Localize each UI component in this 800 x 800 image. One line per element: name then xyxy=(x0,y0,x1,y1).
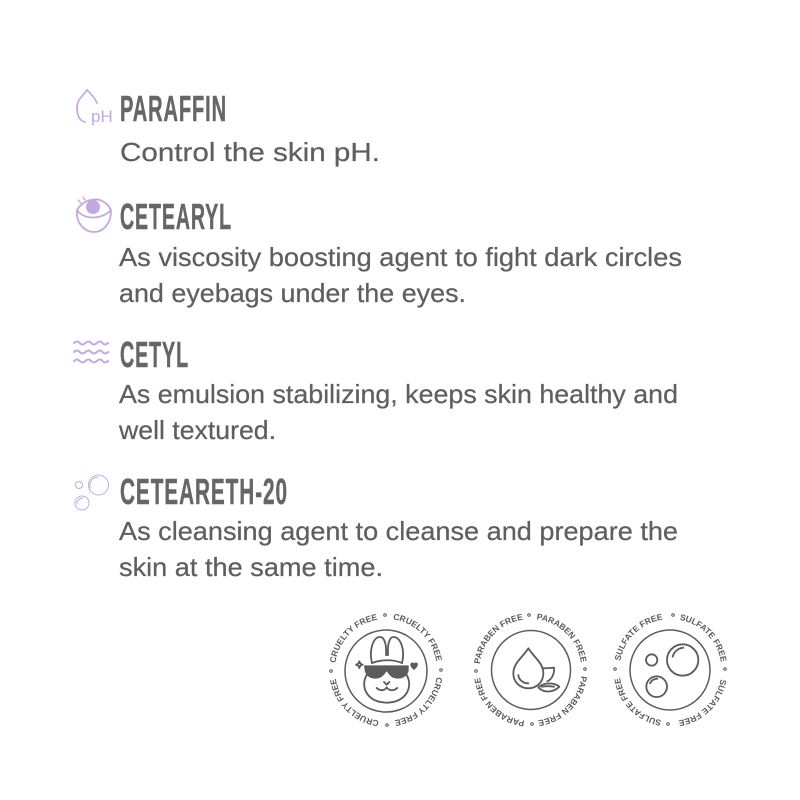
heading: cetyl: CETYL xyxy=(120,334,189,375)
description: cetyl: As emulsion stabilizing, keeps skin healthy and xyxy=(119,379,678,409)
badge: paraben free xyxy=(474,613,587,726)
ingredient: ceteareth-20 xyxy=(75,471,678,582)
description: paraffin: Control the skin pH. xyxy=(120,137,380,167)
badge: sulfate free xyxy=(613,613,727,726)
badge: paraben free: PARABEN FREE xyxy=(474,678,524,726)
description: cetyl: well textured. xyxy=(118,415,276,445)
heading: cetearyl: CETEARYL xyxy=(120,196,232,237)
badge: sulfate free: SULFATE FREE xyxy=(678,680,726,726)
ingredient: paraffin xyxy=(77,88,380,167)
icon: pH drop: pH xyxy=(91,107,113,126)
icon: pH drop xyxy=(77,90,113,126)
badge: cruelty free xyxy=(329,613,443,727)
description: ceteareth-20: As cleansing agent to cleanse and prepare the xyxy=(119,516,678,546)
icon: drop with leaves xyxy=(513,648,559,692)
ingredient: cetearyl xyxy=(77,196,682,308)
badge: sulfate free: SULFATE FREE xyxy=(680,614,727,662)
badge: paraben free: PARABEN FREE xyxy=(536,614,587,662)
badge: sulfate free: SULFATE FREE xyxy=(614,678,661,726)
icon: bubbles xyxy=(646,644,698,697)
description: cetearyl: As viscosity boosting agent to fight dark circles xyxy=(119,242,682,272)
icon: rabbit with sunglasses xyxy=(356,637,418,703)
icon: eye xyxy=(77,197,111,232)
heading: paraffin: PARAFFIN xyxy=(120,88,227,129)
badge: paraben free: PARABEN FREE xyxy=(538,676,587,726)
icon: waves xyxy=(74,342,108,362)
ingredient: cetyl xyxy=(74,334,678,445)
icon: bubbles xyxy=(75,475,108,510)
badge: paraben free: PARABEN FREE xyxy=(474,614,523,664)
badge: cruelty free: CRUELTY FREE xyxy=(394,614,442,662)
heading: ceteareth-20: CETEARETH-20 xyxy=(120,471,288,512)
badge: cruelty free: CRUELTY FREE xyxy=(330,678,378,726)
badge: cruelty free: CRUELTY FREE xyxy=(394,678,442,726)
badge: sulfate free: SULFATE FREE xyxy=(615,614,662,660)
badge: cruelty free: CRUELTY FREE xyxy=(330,614,378,662)
description: ceteareth-20: skin at the same time. xyxy=(119,552,383,582)
description: cetearyl: and eyebags under the eyes. xyxy=(119,278,466,308)
